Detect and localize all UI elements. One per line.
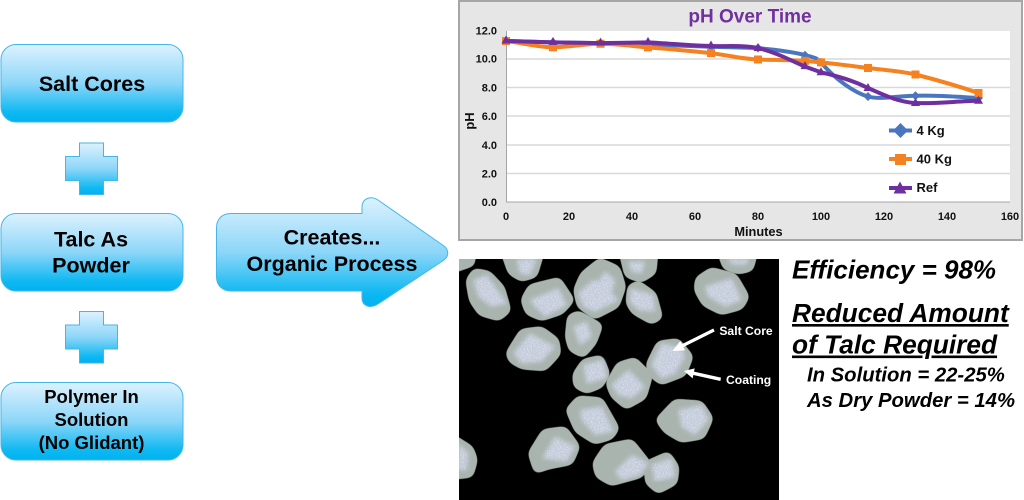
x axis labels: 80 [752, 211, 764, 223]
x axis labels: 100 [812, 211, 830, 223]
photo: coated salt core grains [459, 259, 779, 500]
text: talc percentages: In Solution = 22-25% [807, 364, 1005, 386]
x axis labels: 0 [503, 211, 509, 223]
y axis labels: 12.0 [476, 26, 497, 38]
y axis labels: 6.0 [482, 111, 497, 123]
x axis title: Minutes [734, 224, 783, 239]
box: Talc As Powder [1, 214, 183, 291]
y axis labels: 0.0 [482, 197, 497, 209]
grains inner salt core [458, 259, 750, 482]
text: reduced amount of talc required [792, 298, 1010, 360]
label: Coating: Coating [726, 373, 771, 387]
y axis labels: 8.0 [482, 82, 497, 94]
box: Salt Cores: Salt Cores [39, 72, 145, 96]
y axis labels: 2.0 [482, 168, 497, 180]
arrow: Creates Organic Process: Creates... [284, 226, 380, 250]
text: efficiency: Efficiency = 98% [792, 254, 996, 284]
plot area [506, 31, 1010, 202]
text: reduced amount of talc required: Reduced Amount [792, 298, 1010, 328]
series: 4 Kg [506, 38, 983, 102]
grains outer coating [442, 243, 755, 490]
box: Polymer In Solution: (No Glidant) [39, 432, 144, 453]
x axis labels: 160 [1001, 211, 1019, 223]
box: Salt Cores [1, 44, 183, 122]
box: Polymer In Solution [1, 382, 183, 460]
series: 40 Kg [502, 37, 982, 97]
arrow: Salt Core pointer [672, 328, 715, 351]
box: Talc As Powder: Powder [52, 254, 130, 278]
legend [889, 123, 952, 195]
arrow: Coating pointer [684, 368, 721, 381]
chart title: pH Over Time [688, 6, 812, 28]
icon: plus between Talc and Polymer [66, 312, 118, 363]
y axis labels [476, 26, 497, 209]
x axis labels: 140 [938, 211, 956, 223]
y axis title: pH [462, 112, 477, 130]
icon: plus between Salt Cores and Talc [66, 143, 118, 194]
arrow: Creates Organic Process: Organic Process [247, 252, 417, 276]
box: Polymer In Solution: Solution [55, 409, 128, 430]
text: talc percentages: As Dry Powder = 14% [806, 390, 1015, 412]
legend: 40 Kg: 40 Kg [916, 152, 952, 166]
box: Talc As Powder: Talc As [54, 228, 128, 252]
legend: Ref: Ref [916, 180, 938, 195]
x axis labels: 120 [875, 211, 893, 223]
x axis labels: 60 [689, 211, 701, 223]
y axis labels: 4.0 [482, 140, 497, 152]
panel: pH over time chart [459, 1, 1022, 240]
series: Ref [502, 36, 983, 106]
label: Salt Core: Salt Core [719, 324, 773, 338]
text: reduced amount of talc required: of Talc Required [792, 330, 998, 360]
legend: 4 Kg: 4 Kg [916, 123, 945, 138]
text: talc percentages [806, 364, 1015, 412]
x axis labels [503, 211, 1019, 223]
arrow: Creates Organic Process [216, 198, 448, 306]
y axis labels: 10.0 [476, 54, 497, 66]
x axis labels: 20 [563, 211, 575, 223]
x axis labels: 40 [626, 211, 638, 223]
box: Polymer In Solution: Polymer In [44, 386, 139, 407]
